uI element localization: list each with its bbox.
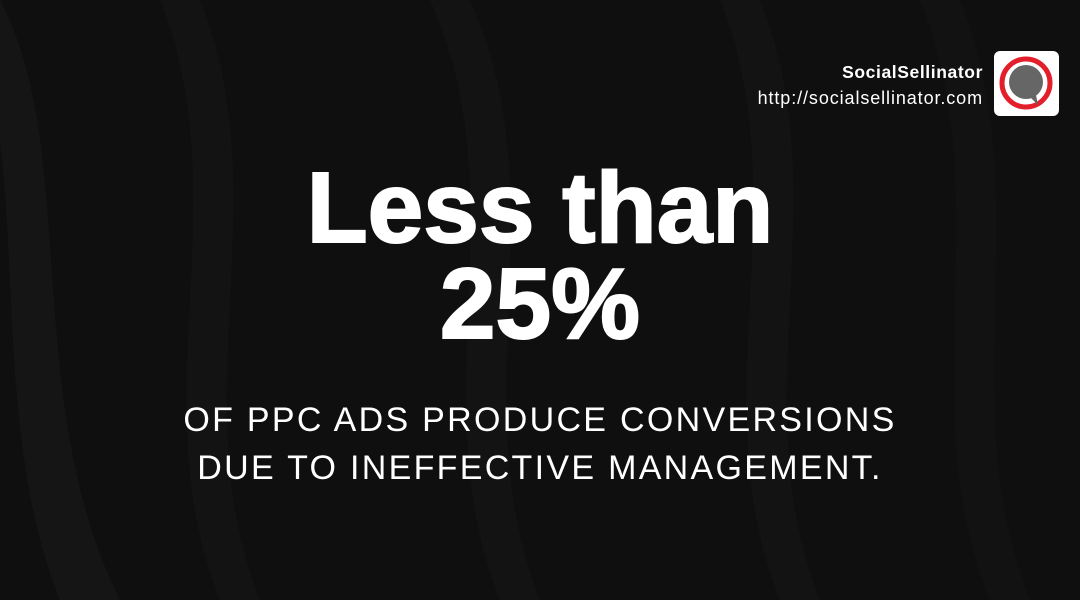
brand text — [758, 62, 983, 108]
brand text: http://socialsellinator.com — [758, 88, 983, 108]
subtitle: DUE TO INEFFECTIVE MANAGEMENT. — [197, 449, 883, 487]
subtitle — [183, 401, 897, 487]
title: Less than — [307, 152, 773, 264]
title — [307, 152, 773, 360]
title: 25% — [440, 248, 640, 360]
icon: logo — [994, 51, 1059, 116]
brand text: SocialSellinator — [842, 62, 983, 82]
subtitle: OF PPC ADS PRODUCE CONVERSIONS — [183, 401, 897, 439]
